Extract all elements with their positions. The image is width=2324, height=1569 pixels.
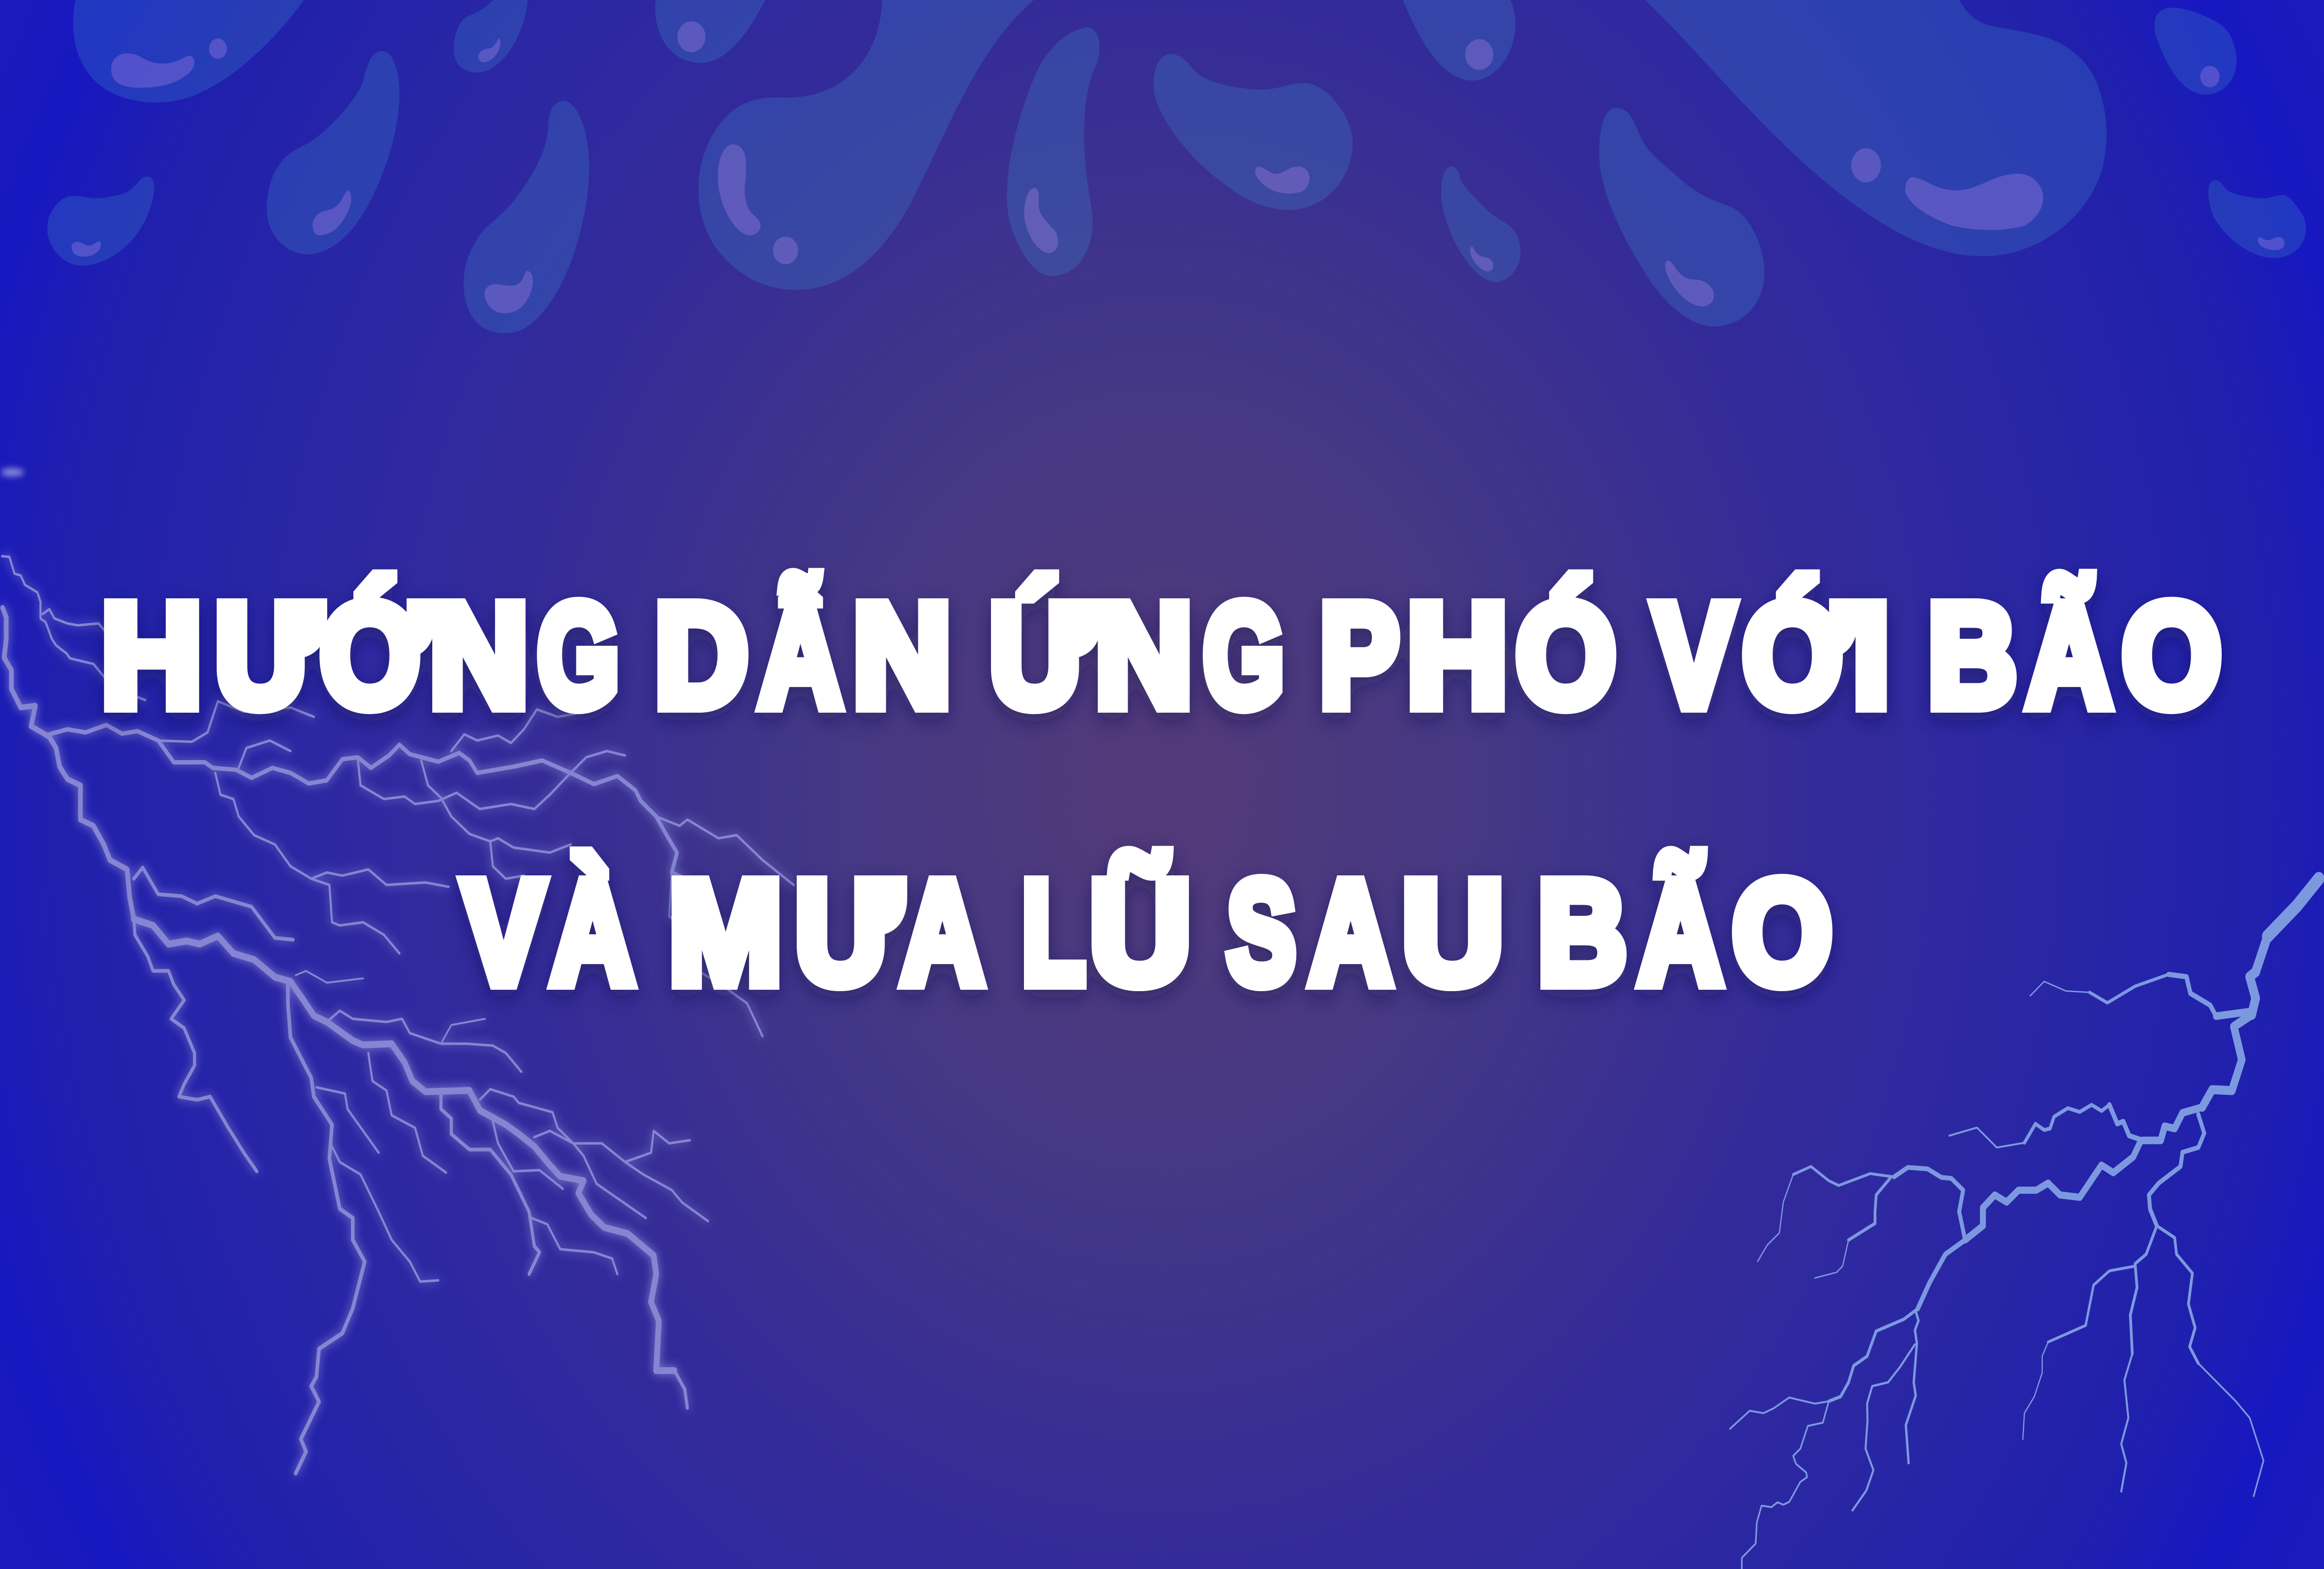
water splash drops, left half — [47, 0, 1100, 333]
title line 2: B — [1538, 851, 1626, 1014]
drop 3 — [655, 0, 766, 63]
drop 5 — [47, 177, 154, 266]
title line 1: N — [429, 574, 528, 737]
title line 1: N — [1095, 574, 1192, 737]
title line 2: A — [901, 851, 984, 1014]
title — [101, 573, 2221, 1014]
title line 1: V — [1653, 574, 1735, 737]
drop 13 — [1441, 166, 1520, 282]
spark at left edge — [1, 469, 24, 476]
title line 1: N — [853, 574, 951, 737]
lightning, left — [2, 556, 794, 1473]
water splash drops, right half — [1154, 0, 2306, 326]
drop 1 — [73, 0, 304, 102]
title line 2: M — [669, 851, 782, 1014]
drop 4 — [267, 51, 399, 254]
lightning, right — [1730, 879, 2319, 1569]
title line 2: U — [1402, 851, 1503, 1014]
title line 1: Ư — [215, 574, 323, 737]
title line 1: Ớ — [1743, 574, 1853, 737]
drop 2 — [454, 0, 528, 73]
title line 2: À — [551, 851, 634, 1014]
title line 1: O — [2122, 574, 2221, 737]
title line 1: G — [1203, 574, 1284, 737]
drop 8 — [1007, 27, 1100, 276]
drop 7 — [699, 0, 1034, 290]
drop 12 — [1599, 108, 1764, 326]
title line 1: Ớ — [320, 574, 430, 737]
title line 1: G — [538, 574, 619, 737]
title line 2: L — [1022, 851, 1085, 1014]
title line 1: Ó — [1516, 574, 1616, 737]
title line 2: O — [1733, 851, 1832, 1014]
title line 1: H — [101, 574, 202, 737]
title line 2: Ư — [795, 851, 903, 1014]
title line 1: Ẫ — [759, 573, 842, 737]
drop 11 — [1645, 0, 2106, 256]
title line 2: S — [1227, 851, 1295, 1014]
title line 1: D — [655, 574, 748, 737]
title line 1: I — [1853, 574, 1889, 737]
title line 2: V — [463, 851, 545, 1014]
title line 2: A — [1309, 851, 1392, 1014]
drop 14 — [2154, 7, 2237, 95]
title line 1: B — [1928, 574, 2016, 737]
title line 2: Ã — [1639, 851, 1722, 1014]
title line 2: Ũ — [1090, 851, 1191, 1014]
title line 1: Ứ — [990, 574, 1097, 737]
title line 1: H — [1407, 574, 1507, 737]
title line 1: P — [1320, 574, 1399, 737]
drop 10 — [1403, 0, 1515, 80]
drop 15 — [2208, 180, 2306, 258]
drop 6 — [463, 101, 589, 333]
title line 1: Ã — [2027, 574, 2112, 737]
drop 9 — [1154, 54, 1353, 210]
